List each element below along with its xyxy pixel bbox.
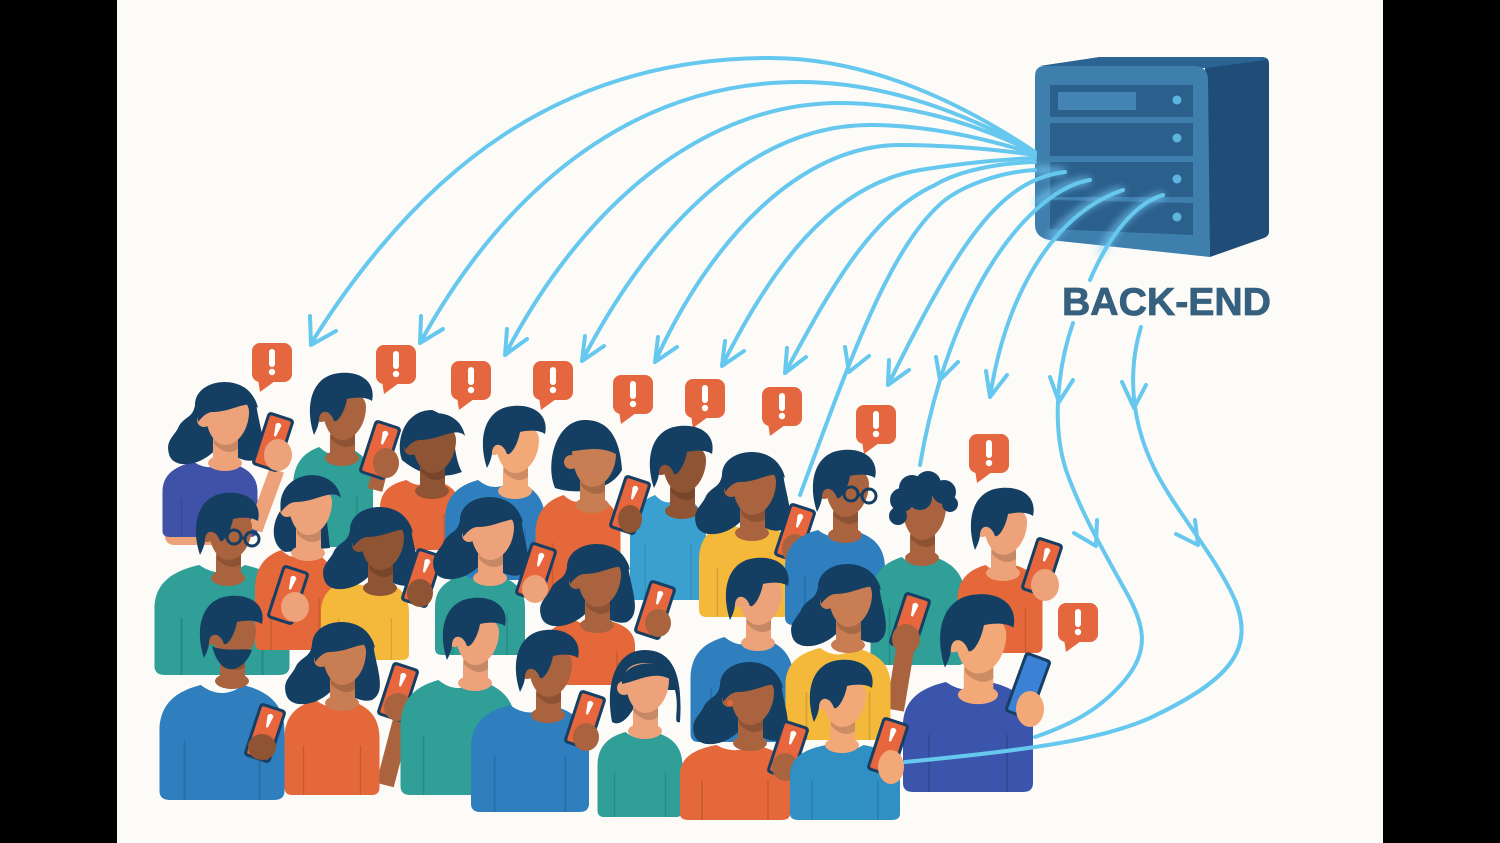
- person 14: [433, 497, 558, 655]
- person 18: [160, 596, 287, 800]
- person 17: [786, 564, 932, 740]
- label: back-end: BACK-END: [1062, 281, 1271, 324]
- person 25: front right, blue phone: [903, 594, 1052, 792]
- crowd: back row: [162, 373, 1064, 665]
- glow inside server: [1035, 170, 1163, 255]
- person 2: [293, 373, 402, 547]
- person 9: [870, 471, 966, 665]
- person 4: [445, 406, 546, 580]
- person 20: [400, 598, 516, 795]
- arrow: final line crossing the front-right person: [905, 600, 1242, 762]
- person 1: [162, 382, 295, 545]
- person 3: [380, 410, 465, 550]
- crowd: middle row: [154, 475, 932, 742]
- person 10: [958, 488, 1064, 653]
- person 24: [790, 660, 910, 820]
- crowd: front row: [160, 594, 1052, 820]
- alert bubbles: [252, 343, 1098, 652]
- person 11: [154, 493, 290, 675]
- person 8: [785, 450, 885, 625]
- person 23: [680, 662, 810, 820]
- arrows from server to the crowd: [310, 58, 1242, 737]
- person 15: [540, 544, 677, 685]
- person 12: [255, 475, 341, 650]
- person 6: [608, 426, 713, 600]
- person 19: [284, 622, 420, 795]
- person 22: [598, 650, 682, 817]
- person 16: [690, 558, 794, 742]
- server: back-end: [1035, 57, 1269, 257]
- person 13: [321, 507, 444, 660]
- person 5: [536, 420, 622, 595]
- person 7: [695, 452, 817, 617]
- person 21: [471, 630, 607, 812]
